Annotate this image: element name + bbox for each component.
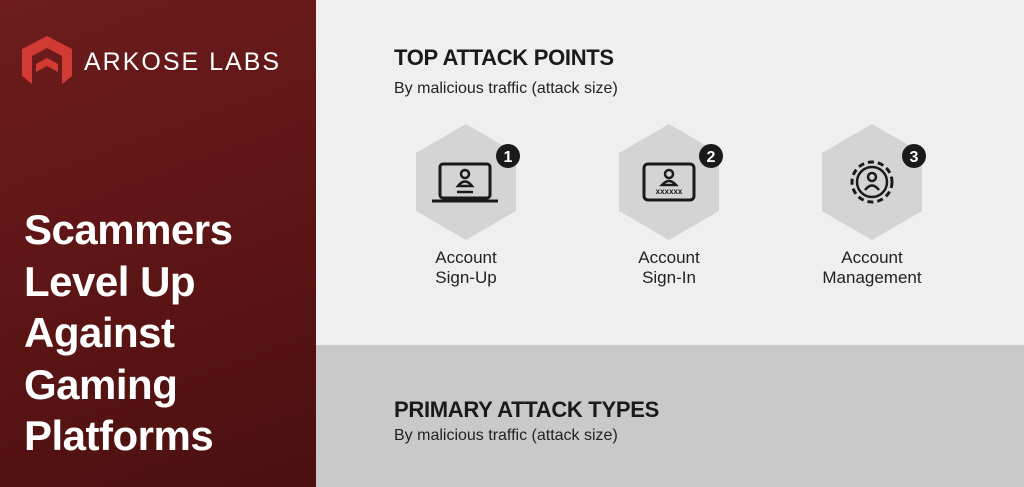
label: sign-in (638, 248, 700, 287)
subheading: By malicious traffic (attack size) (394, 80, 618, 97)
label: management (822, 248, 922, 287)
label: management: Account (841, 248, 903, 267)
title: Gaming (24, 360, 177, 408)
logo: ARKOSE LABS (84, 48, 281, 76)
icon: sign-in (619, 124, 723, 240)
panel: left hero (0, 0, 316, 487)
icon: sign-up: 1 (504, 149, 513, 166)
icon: management (822, 124, 926, 240)
icon: sign-in: 2 (707, 149, 716, 166)
title (24, 206, 232, 459)
panel: top attack points (316, 0, 1024, 345)
label: sign-up: Account (435, 248, 497, 267)
icon: sign-up (416, 124, 520, 240)
title: Against (24, 309, 175, 356)
title: Level Up (24, 258, 195, 304)
heading: TOP ATTACK POINTS (394, 45, 614, 70)
panel: primary attack types (316, 345, 1024, 487)
title: Platforms (24, 412, 213, 459)
title: Scammers (24, 206, 232, 253)
label: management: Management (822, 268, 922, 287)
label: sign-up: Sign-Up (435, 268, 497, 287)
subheading: By malicious traffic (attack size) (394, 427, 618, 444)
icon: management: 3 (910, 149, 919, 166)
logo (22, 36, 281, 84)
heading: PRIMARY ATTACK TYPES (394, 397, 659, 422)
icon: sign-in: xxxxxx (656, 187, 683, 196)
label: sign-in: Sign-In (642, 268, 696, 287)
label: sign-in: Account (638, 248, 700, 267)
label: sign-up (435, 248, 497, 287)
